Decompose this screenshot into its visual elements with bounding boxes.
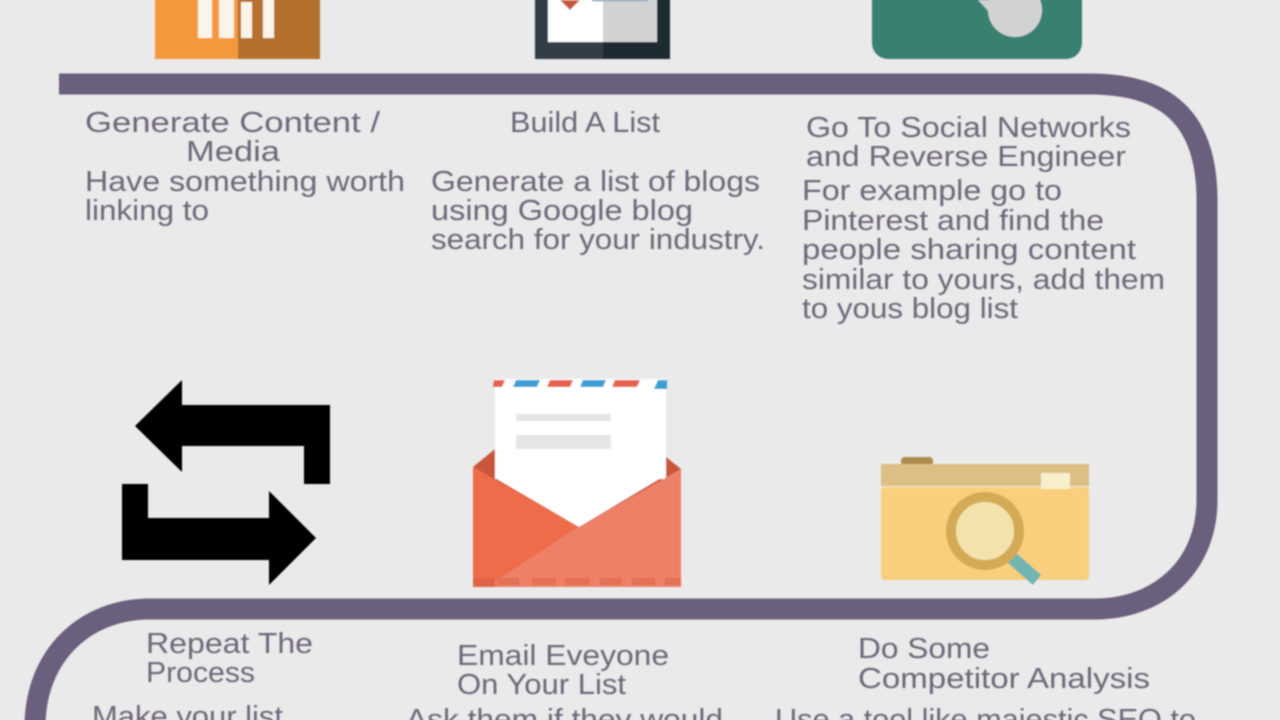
text: Pinterest example: For example go to — [802, 175, 1062, 207]
heading: Generate Content / Media: Media — [186, 136, 281, 168]
heading: Build A List: Build A List — [510, 107, 660, 139]
heading: Email Eveyone On Your List: Email Eveyone — [457, 640, 669, 672]
text: Pinterest example: to yous blog list — [802, 293, 1018, 325]
heading: Go To Social Networks and Reverse Engineer: and Reverse Engineer — [806, 141, 1126, 173]
icon: orange bar chart — [155, 0, 320, 59]
text: Pinterest example: people sharing content — [802, 234, 1136, 266]
heading: Go To Social Networks and Reverse Engineer: Go To Social Networks — [806, 112, 1131, 144]
heading: Generate Content / Media: Generate Content / — [85, 107, 381, 139]
text: Pinterest example — [802, 175, 1165, 325]
icon: green social badge — [872, 0, 1082, 59]
heading: Repeat The Process: Process — [146, 657, 255, 689]
heading: Do Some Competitor Analysis: Do Some — [858, 633, 990, 665]
text: Pinterest example: similar to yours, add them — [802, 264, 1165, 296]
heading: Do Some Competitor Analysis — [858, 633, 1150, 695]
text: Generate a list of blogs — [431, 166, 765, 256]
heading: Email Eveyone On Your List: On Your List — [457, 669, 626, 701]
text: Pinterest example: Pinterest and find the — [802, 205, 1104, 237]
text: Have something worth linking to — [85, 166, 405, 227]
heading: Generate Content / Media — [85, 107, 381, 168]
icon: camera with magnifier — [881, 457, 1089, 580]
heading: Email Eveyone On Your List — [457, 640, 669, 701]
icon: open envelope with letter — [473, 379, 681, 587]
text: Have something worth linking to: Have something worth — [85, 166, 405, 198]
text: Generate a list of blogs: search for your industry. — [431, 224, 765, 256]
heading: Repeat The Process — [146, 628, 313, 689]
text: Have something worth linking to: linking to — [85, 195, 209, 227]
text: Generate a list of blogs: Generate a list of blogs — [431, 166, 760, 198]
heading: Repeat The Process: Repeat The — [146, 628, 313, 660]
heading: Do Some Competitor Analysis: Competitor Analysis — [858, 663, 1150, 695]
text: Generate a list of blogs: using Google blog — [431, 195, 693, 227]
icon: repeat arrows — [122, 380, 330, 585]
heading: Go To Social Networks and Reverse Engineer — [806, 112, 1131, 173]
icon: list document — [535, 0, 670, 59]
